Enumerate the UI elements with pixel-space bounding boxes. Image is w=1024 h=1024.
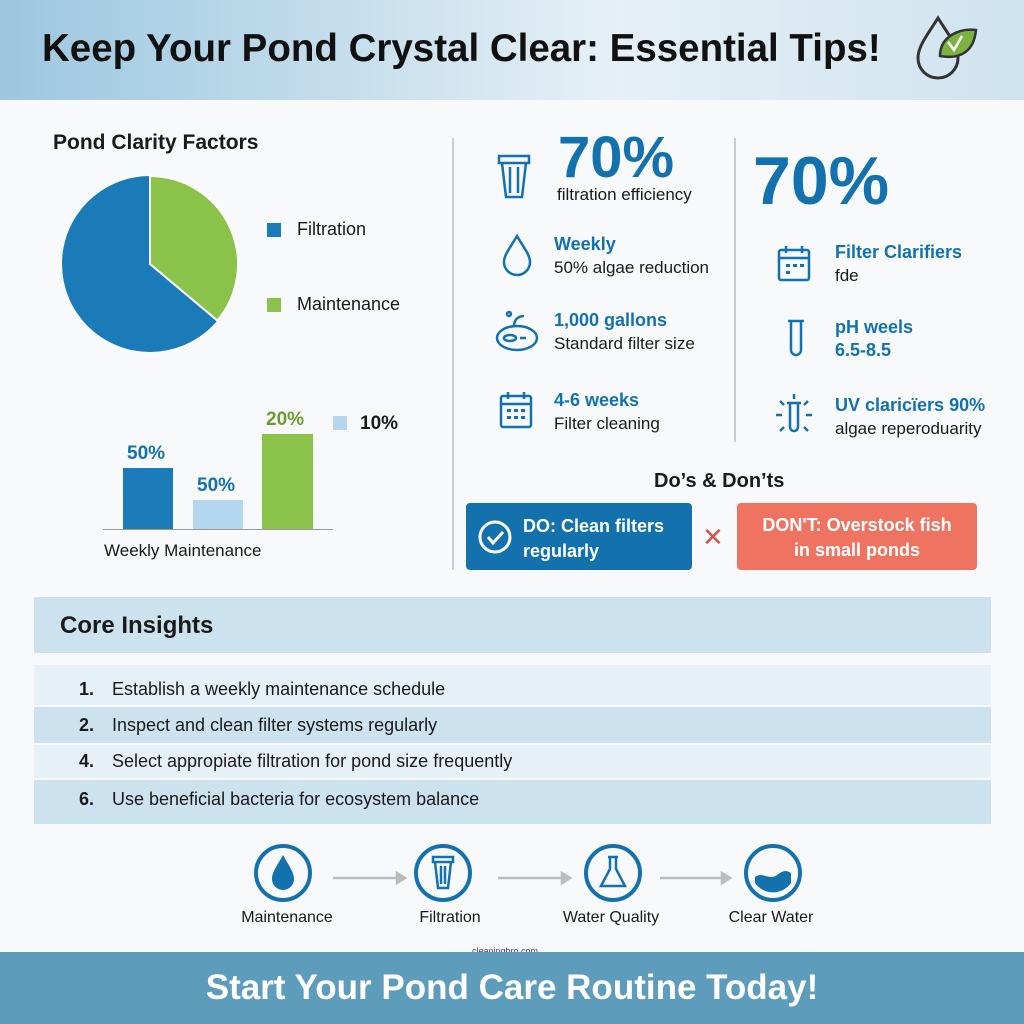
stat: UV: algae reperoduarity (835, 419, 981, 438)
stat: weekly: Weekly (554, 234, 616, 254)
insights list: Establish a weekly maintenance schedule (112, 679, 445, 699)
do box: regularly (523, 541, 599, 561)
big stat 70%: 70% (753, 143, 889, 219)
insights list: Select appropiate filtration for pond size frequently (112, 751, 512, 771)
process flow: Maintenance (241, 909, 333, 926)
bar chart: 10% (360, 413, 398, 434)
insights list: 6. (79, 789, 94, 809)
watermark: cleaningbro.com (472, 946, 538, 956)
icon: calendar 2 (778, 246, 810, 282)
legend: Maintenance (297, 294, 400, 314)
stat: weeks: Filter cleaning (554, 414, 660, 433)
icon: test tube (788, 320, 804, 356)
insights list: Inspect and clean filter systems regularly (112, 715, 437, 735)
dont box: in small ponds (794, 540, 920, 560)
icon: leaf drop (916, 15, 978, 80)
insights list: Use beneficial bacteria for ecosystem balance (112, 789, 479, 809)
stat: weeks: 4-6 weeks (554, 390, 639, 410)
stat: weeks (554, 390, 660, 433)
bar chart: 20% (266, 409, 304, 430)
pie chart (62, 176, 238, 352)
pie heading: Pond Clarity Factors (53, 131, 258, 154)
stat: filter clarifiers: Filter Clarifiers (835, 242, 962, 262)
stat: UV: UV claricïers 90% (835, 395, 985, 415)
do box (466, 503, 692, 570)
header banner (0, 0, 1024, 100)
insights list (34, 665, 991, 824)
bar chart: 50% (197, 475, 235, 496)
stat: weekly: 50% algae reduction (554, 258, 709, 277)
icon: drop (502, 234, 532, 276)
stat: pH: pH weels (835, 317, 913, 337)
icon: calendar (500, 392, 532, 428)
process flow (241, 844, 814, 926)
stat: gallons (554, 310, 695, 353)
icon: cross: ✕ (702, 522, 724, 552)
bar chart: Weekly Maintenance (104, 541, 262, 560)
dont box: DON'T: Overstock fish (762, 515, 952, 535)
dividers (452, 138, 454, 570)
core insights heading: Core Insights (60, 612, 213, 639)
process flow: Filtration (419, 909, 481, 926)
footer banner: Start Your Pond Care Routine Today! (206, 968, 818, 1007)
insights list: 4. (79, 751, 94, 771)
legend: Filtration (297, 219, 366, 239)
stat: gallons: Standard filter size (554, 334, 695, 353)
stat: gallons: 1,000 gallons (554, 310, 667, 330)
stat: filter clarifiers (835, 242, 962, 285)
core insights heading (34, 597, 991, 653)
insights list: 2. (79, 715, 94, 735)
stat: filtration efficiency: filtration efficiency (557, 185, 692, 204)
bar chart (103, 409, 398, 560)
icon: pond (496, 310, 538, 352)
stat: filtration efficiency (498, 125, 692, 204)
dos & donts heading: Do’s & Don’ts (654, 470, 784, 492)
insights list: 1. (79, 679, 94, 699)
footer banner (0, 952, 1024, 1024)
stat: weekly (554, 234, 709, 277)
stat: UV (835, 395, 985, 438)
legend (267, 219, 400, 314)
stat: filtration efficiency: 70% (558, 125, 674, 190)
stat: filter clarifiers: fde (835, 266, 859, 285)
process flow: Water Quality (563, 909, 659, 926)
stat: pH (835, 317, 913, 360)
icon: uv tube (776, 394, 812, 432)
bar chart: 50% (127, 443, 165, 464)
dont box (737, 503, 977, 570)
process flow: Clear Water (729, 909, 813, 926)
title: Keep Your Pond Crystal Clear: Essential Tips! (42, 27, 881, 70)
do box: DO: Clean filters (523, 516, 664, 536)
stat: pH: 6.5-8.5 (835, 340, 891, 360)
